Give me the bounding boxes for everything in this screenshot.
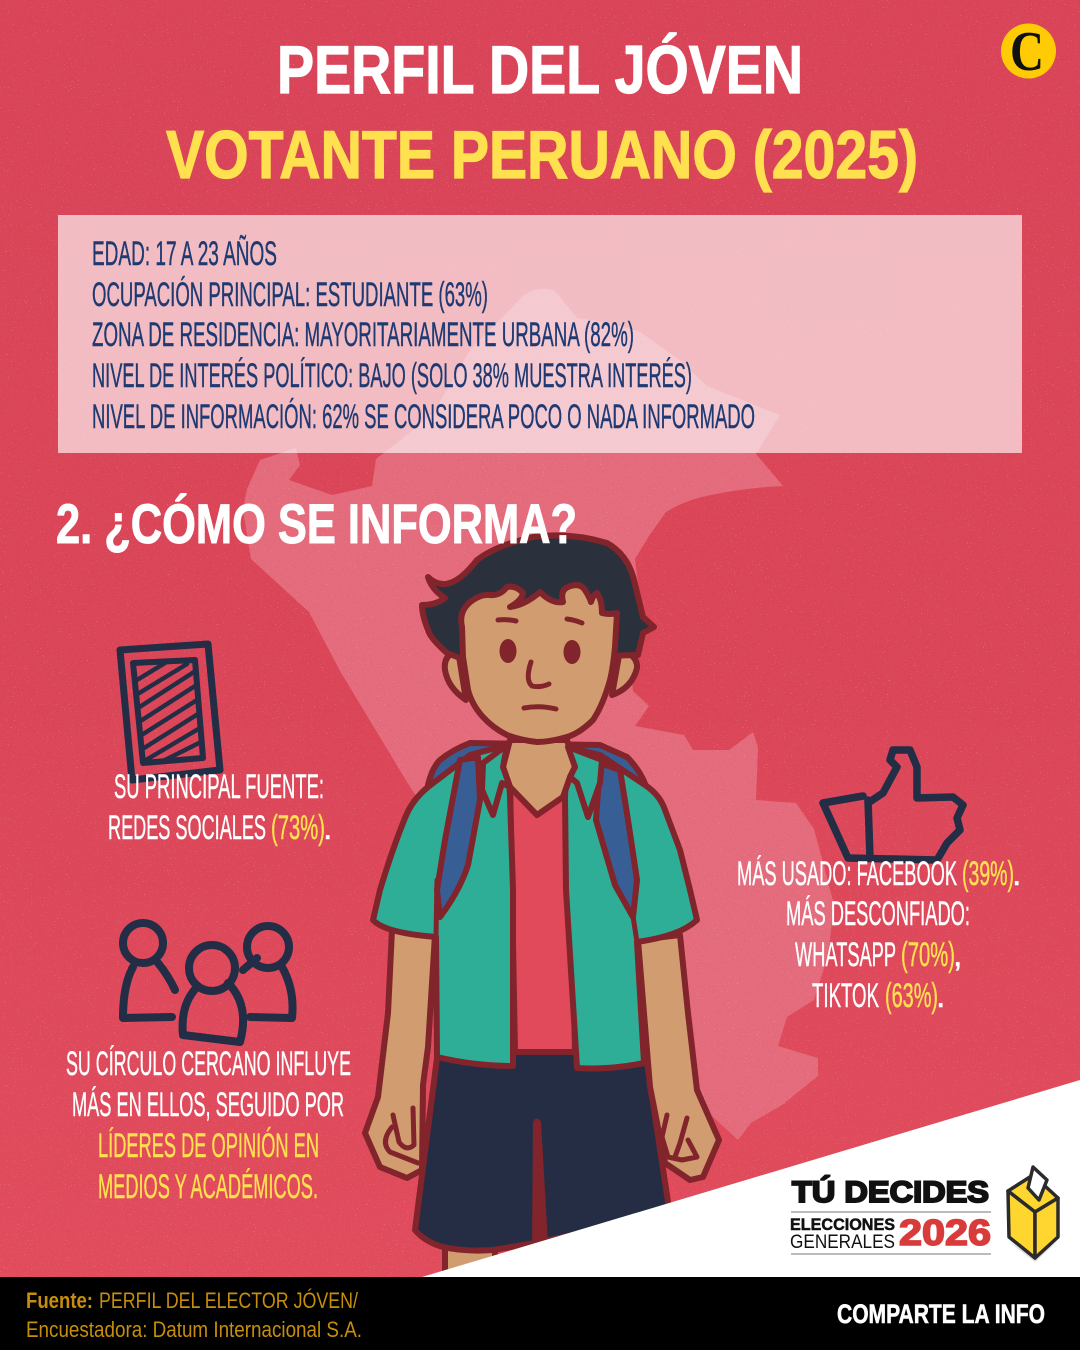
backpack top — [428, 743, 646, 810]
sleeve seams — [436, 880, 637, 942]
shirt — [510, 780, 575, 1052]
hand lines — [385, 1108, 697, 1163]
logo: Tú Decides — [790, 1175, 991, 1255]
left arm — [365, 930, 435, 1178]
left jacket panel — [373, 745, 513, 1066]
footer bar — [0, 1277, 1080, 1350]
white corner — [422, 1080, 1080, 1277]
title: PERFIL DEL JÓVEN — [277, 32, 803, 108]
logo: El Comercio C: C — [1010, 21, 1044, 83]
logo: Tú Decides: 2026 — [899, 1212, 991, 1253]
text: networks — [737, 855, 1021, 1015]
text: networks: , — [953, 936, 962, 974]
text: networks: . — [936, 977, 945, 1015]
logo: Tú Decides: ELECCIONES — [790, 1216, 895, 1234]
title — [166, 32, 918, 193]
leg — [445, 1240, 495, 1272]
source note: Encuestadora: Datum Internacional S.A. — [26, 1317, 362, 1342]
text: networks: (70%) — [901, 936, 955, 974]
text: networks: WHATSAPP — [795, 936, 896, 974]
character: boy with backpack — [365, 535, 719, 1272]
text: networks: . — [1012, 855, 1021, 893]
shorts centre seam — [532, 1118, 548, 1250]
text: main source: REDES SOCIALES — [108, 809, 266, 847]
source note: PERFIL DEL ELECTOR JÓVEN/ — [99, 1288, 359, 1313]
section heading: 2. ¿CÓMO SE INFORMA? — [56, 492, 577, 555]
icon: group of people — [123, 923, 293, 1042]
text: close circle influence: SU CÍRCULO CERCANO INFLUYE — [66, 1045, 351, 1083]
right jacket panel — [565, 747, 697, 1068]
eyes — [500, 639, 580, 664]
title: VOTANTE PERUANO (2025) — [166, 117, 918, 193]
hair — [422, 535, 654, 660]
shorts — [415, 1052, 670, 1251]
text: networks: TIKTOK — [812, 977, 879, 1015]
source note — [26, 1288, 362, 1342]
source note: Fuente: — [26, 1288, 93, 1313]
face — [461, 585, 617, 742]
icon: tablet — [120, 644, 220, 780]
text: close circle influence: MEDIOS Y ACADÉMICOS. — [98, 1168, 318, 1206]
panel: voter profile — [58, 215, 1022, 453]
panel: voter profile: EDAD: 17 A 23 AÑOS — [92, 235, 277, 273]
eyebrows, nose and mouth — [498, 619, 582, 709]
text: main source: (73%) — [271, 809, 325, 847]
icon: thumbs up — [823, 750, 963, 860]
text: main source: . — [323, 809, 332, 847]
text: close circle influence: LÍDERES DE OPINIÓN EN — [98, 1127, 319, 1165]
text: close circle influence: MÁS EN ELLOS, SEGUIDO POR — [72, 1086, 344, 1124]
text: main source — [108, 768, 332, 847]
text: networks: (63%) — [885, 977, 938, 1015]
map of Peru silhouette — [243, 289, 834, 1140]
logo: Tú Decides: TÚ DECIDES — [792, 1175, 989, 1209]
right arm — [638, 935, 719, 1180]
ears — [445, 650, 466, 700]
text: main source: SU PRINCIPAL FUENTE: — [114, 768, 324, 806]
logo: Tú Decides: GENERALES — [790, 1232, 895, 1253]
text: networks: (39%) — [962, 855, 1014, 893]
neck — [503, 740, 575, 815]
collar — [482, 745, 510, 815]
text: close circle influence — [66, 1045, 351, 1206]
backpack straps — [437, 757, 480, 917]
icon: ballot box — [1007, 1167, 1058, 1262]
panel: voter profile: OCUPACIÓN PRINCIPAL: ESTUDIANTE (63%) — [92, 276, 488, 314]
panel: voter profile: ZONA DE RESIDENCIA: MAYORITARIAMENTE URBANA (82%) — [92, 316, 634, 354]
